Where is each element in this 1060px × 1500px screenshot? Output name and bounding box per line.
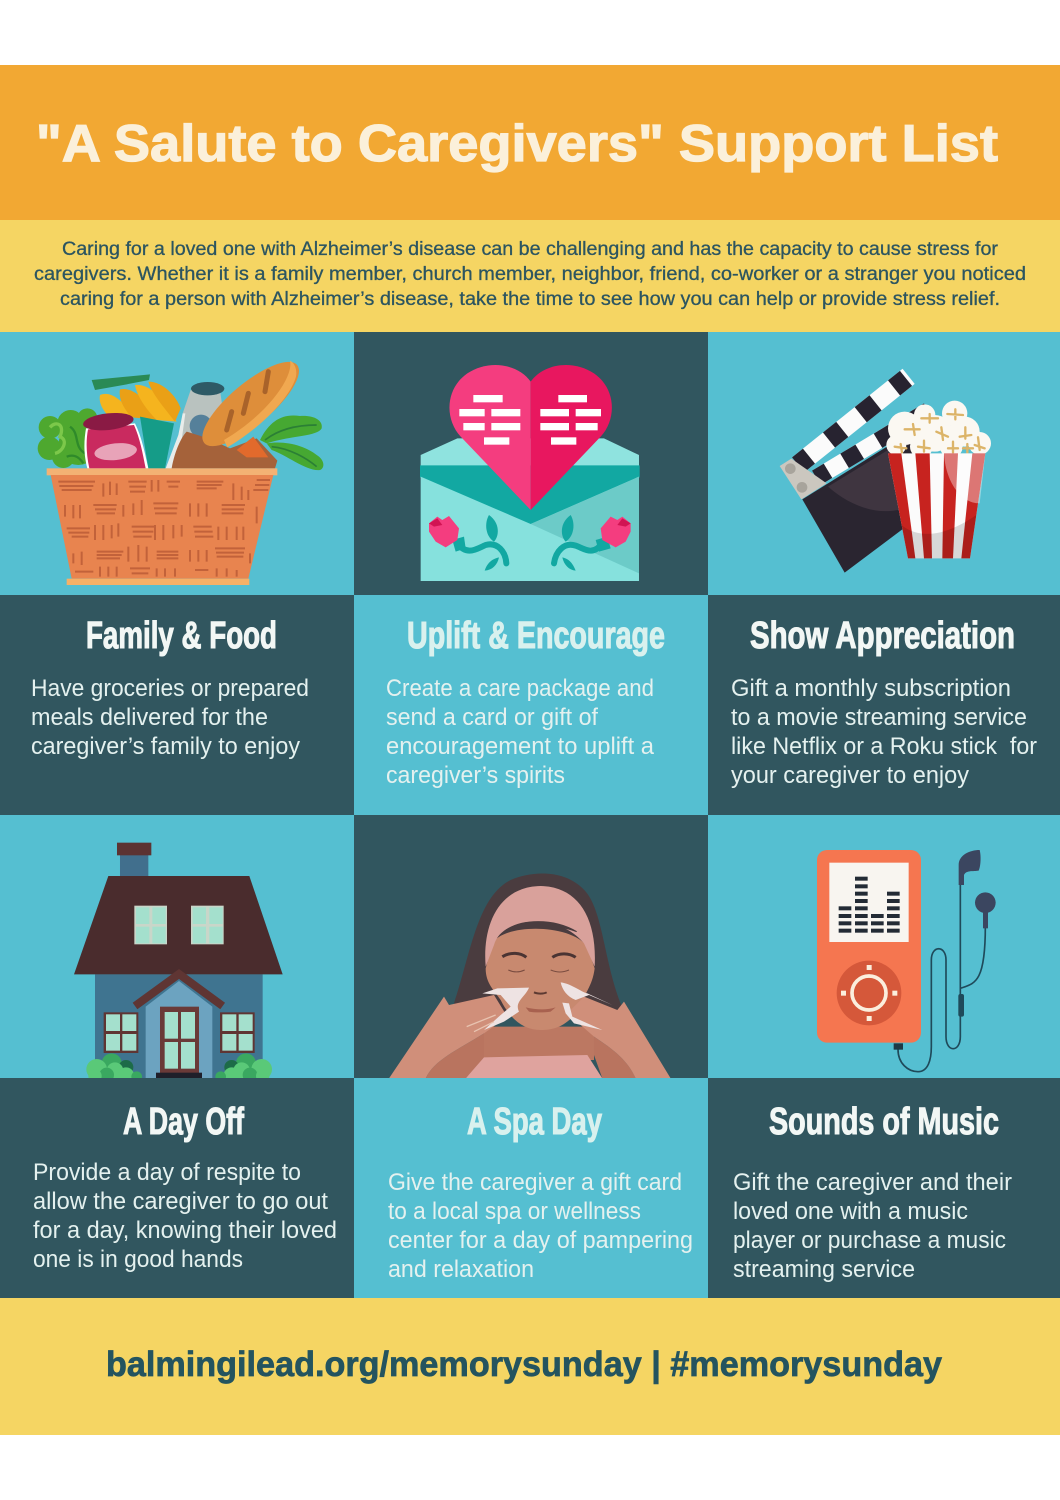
footer link and hashtag: balmingilead.org/memorysunday | #memorysunday: [106, 1345, 943, 1384]
icon: clapperboard and popcorn: [780, 369, 991, 573]
body text: uplift and encourage: Create a care package and: [386, 675, 654, 702]
body text: show appreciation: Gift a monthly subscription: [731, 675, 1011, 702]
body text: a day off: allow the caregiver to go out: [33, 1188, 328, 1215]
heading: a day off: A Day Off: [123, 1101, 244, 1143]
body text: a day off: Provide a day of respite to: [33, 1159, 301, 1186]
icon: heart letter in envelope: [420, 365, 640, 581]
body text: sounds of music: Gift the caregiver and their: [733, 1169, 1012, 1196]
panel: music illustration: [708, 815, 1060, 1078]
body text: a day off: one is in good hands: [33, 1246, 243, 1273]
icon: woman with face cream: [389, 874, 671, 1078]
panel: day off text: [0, 1078, 354, 1298]
title banner: [0, 65, 1060, 220]
title: "A Salute to Caregivers" Support List: [36, 115, 998, 173]
body text: a spa day: Give the caregiver a gift card: [388, 1169, 682, 1196]
body text: a day off: for a day, knowing their loved: [33, 1217, 337, 1244]
body text: sounds of music: loved one with a music: [733, 1198, 968, 1225]
body text: show appreciation: [731, 675, 1037, 789]
panel: music text: [708, 1078, 1060, 1298]
intro text: [34, 238, 1026, 310]
body text: a spa day: and relaxation: [388, 1256, 534, 1283]
body text: uplift and encourage: [386, 675, 655, 789]
intro text: caring for a person with Alzheimer’s disease, take the time to see how you can help or provide stress relief.: [60, 288, 1000, 310]
icon: grocery basket: [38, 349, 323, 585]
intro panel: [0, 220, 1060, 332]
heading: uplift and encourage: Uplift & Encourage: [407, 615, 665, 657]
body text: show appreciation: like Netflix or a Roku stick for: [731, 733, 1037, 760]
panel: appreciation illustration: [708, 332, 1060, 595]
panel: uplift text: [354, 595, 708, 815]
body text: family and food: meals delivered for the: [31, 704, 268, 731]
body text: uplift and encourage: send a card or gift of: [386, 704, 598, 731]
panel: day off illustration: [0, 815, 354, 1083]
panel: spa text: [354, 1078, 708, 1298]
body text: family and food: [31, 675, 309, 760]
body text: family and food: caregiver’s family to enjoy: [31, 733, 300, 760]
body text: a spa day: center for a day of pampering: [388, 1227, 693, 1254]
panel: spa illustration: [354, 815, 708, 1078]
panel: family and food text: [0, 595, 354, 815]
panel: uplift illustration: [354, 332, 708, 595]
body text: sounds of music: streaming service: [733, 1256, 915, 1283]
heading: family and food: Family & Food: [86, 615, 277, 657]
body text: uplift and encourage: caregiver’s spirits: [386, 762, 565, 789]
icon: music player and earphones: [817, 850, 996, 1072]
panel: appreciation text: [708, 595, 1060, 815]
heading: a spa day: A Spa Day: [467, 1101, 602, 1143]
icon: house: [74, 843, 283, 1083]
intro text: caregivers. Whether it is a family member, church member, neighbor, friend, co-worker or a stranger you noticed: [34, 263, 1026, 285]
body text: a spa day: to a local spa or wellness: [388, 1198, 641, 1225]
body text: sounds of music: [733, 1169, 1012, 1283]
body text: a spa day: [388, 1169, 693, 1283]
body text: a day off: [33, 1159, 337, 1273]
body text: uplift and encourage: encouragement to uplift a: [386, 733, 655, 760]
body text: show appreciation: to a movie streaming service: [731, 704, 1027, 731]
body text: sounds of music: player or purchase a music: [733, 1227, 1006, 1254]
body text: family and food: Have groceries or prepared: [31, 675, 309, 702]
intro text: Caring for a loved one with Alzheimer’s disease can be challenging and has the capacity to cause stress for: [62, 238, 998, 260]
footer banner: [0, 1298, 1060, 1435]
panel: family and food illustration: [0, 332, 354, 595]
body text: show appreciation: your caregiver to enjoy: [731, 762, 969, 789]
